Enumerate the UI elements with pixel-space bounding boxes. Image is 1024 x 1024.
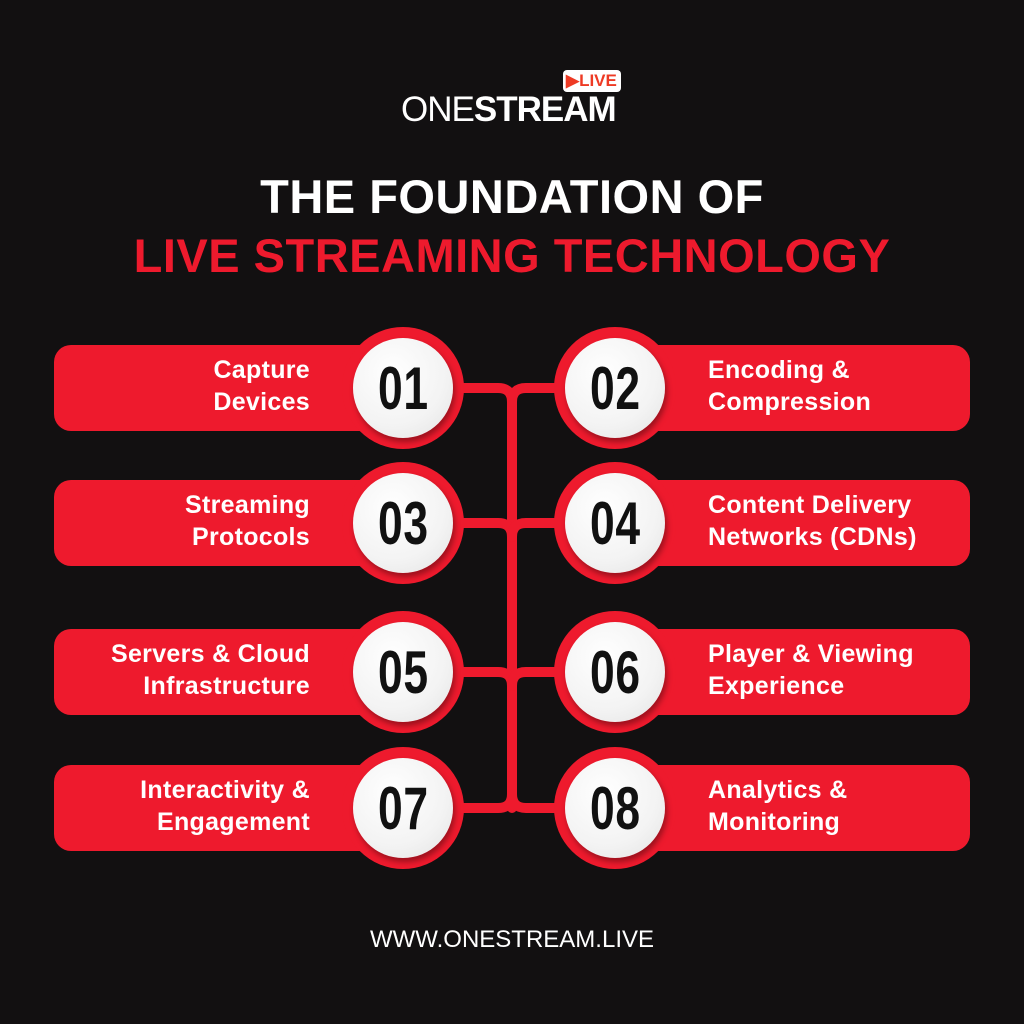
item 05: Servers & Cloud: [111, 640, 310, 668]
item 02: Encoding &: [708, 356, 850, 384]
logo badge: LIVE: ▶LIVE: [566, 71, 617, 90]
item 08: Monitoring: [708, 808, 840, 836]
item 02: Compression: [708, 388, 871, 416]
title: [134, 170, 890, 282]
item 07: [54, 747, 464, 869]
title: THE FOUNDATION OF: [260, 170, 764, 223]
logo wordmark: ONESTREAM: [401, 90, 616, 129]
item 08: 08: [590, 774, 640, 842]
item 01: Devices: [213, 388, 310, 416]
item 06: [554, 611, 970, 733]
item 03: Streaming: [185, 491, 310, 519]
item 03: [54, 462, 464, 584]
item 08: [554, 747, 970, 869]
item 06: Player & Viewing: [708, 640, 914, 668]
item 04: 04: [590, 490, 640, 556]
item 04: Networks (CDNs): [708, 523, 917, 551]
item 08: Analytics &: [708, 776, 847, 804]
logo: [401, 70, 621, 129]
item 01: Capture: [213, 356, 310, 384]
item 05: 05: [378, 638, 428, 706]
item 03: Protocols: [192, 523, 310, 551]
item 07: Interactivity &: [140, 776, 310, 804]
footer url: WWW.ONESTREAM.LIVE: [370, 926, 654, 953]
item 04: Content Delivery: [708, 491, 911, 519]
item 02: 02: [590, 354, 640, 422]
title: LIVE STREAMING TECHNOLOGY: [134, 229, 890, 282]
item 07: Engagement: [157, 808, 310, 836]
item 03: 03: [378, 490, 428, 556]
item 01: 01: [378, 354, 428, 422]
item 02: [554, 327, 970, 449]
item 06: 06: [590, 638, 640, 706]
item 05: [54, 611, 464, 733]
item 06: Experience: [708, 672, 844, 700]
item 05: Infrastructure: [143, 672, 310, 700]
item 04: [554, 462, 970, 584]
item 01: [54, 327, 464, 449]
item 07: 07: [378, 774, 428, 842]
